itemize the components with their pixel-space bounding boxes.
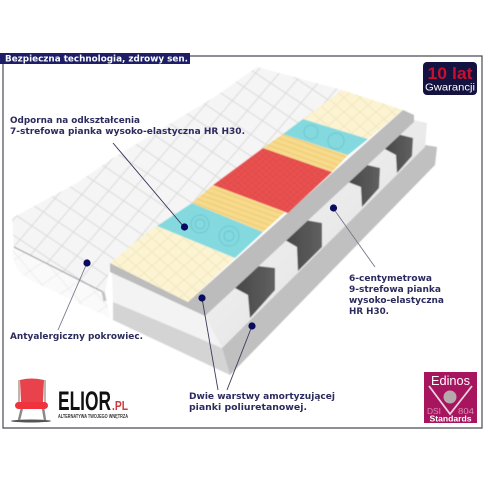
callout dots (83, 204, 337, 330)
heading banner: Bezpieczna technologia, zdrowy sen. (5, 54, 188, 64)
icon: red chair (11, 378, 51, 422)
callout text: two layers: pianki poliuretanowej. (189, 403, 307, 413)
callout text: seven-zone foam (10, 116, 245, 137)
callout text: two layers: Dwie warstwy amortyzującej (189, 392, 335, 402)
zone: front cream (110, 226, 235, 302)
callout text: nine-zone foam: wysoko-elastyczna (349, 296, 444, 306)
callout text: two layers (189, 392, 335, 413)
nine-zone foam (112, 120, 427, 348)
callout text: nine-zone foam: HR H30. (349, 307, 389, 317)
logo: Elior (11, 378, 128, 422)
zone: front cyan (157, 203, 263, 258)
callout text: seven-zone foam: Odporna na odkształcenia (10, 116, 140, 126)
badge: Edinos standards: 804 (458, 407, 475, 416)
callout lines (58, 143, 375, 390)
callout text: nine-zone foam: 6-centymetrowa (349, 274, 432, 284)
seven-zone foam (110, 90, 403, 302)
grey top foam band (110, 110, 414, 316)
badge: 10 year guarantee (423, 62, 477, 95)
callout text: nine-zone foam (349, 274, 444, 317)
callout text: cover: Antyalergiczny pokrowiec. (10, 332, 143, 342)
mattress cover (12, 67, 342, 318)
zone: back cream (303, 90, 403, 139)
badge: 10 year guarantee: Gwarancji (425, 82, 475, 94)
badge: Edinos standards: DSI (427, 407, 441, 416)
callout text: nine-zone foam: 9-strefowa pianka (349, 285, 441, 295)
badge: Edinos standards: Standards (430, 414, 472, 424)
callout text: seven-zone foam: 7-strefowa pianka wysoko-elastyczna HR H30. (10, 127, 245, 137)
frame (3, 56, 482, 428)
zone: back cyan (283, 119, 368, 155)
bottom foam layer (113, 145, 437, 375)
logo domain suffix: .PL (112, 398, 128, 413)
zone: back yellow (263, 134, 348, 172)
zone: red (213, 148, 332, 213)
logo tagline: ALTERNATYWA TWOJEGO WNĘTRZA (58, 414, 128, 420)
badge: Edinos standards (424, 372, 477, 424)
badge: Edinos standards: Edinos (431, 374, 470, 388)
badge: 10 year guarantee: 10 lat (428, 64, 473, 83)
zone: front yellow (192, 185, 285, 232)
mattress illustration (12, 67, 437, 375)
logo wordmark: ELIOR (58, 386, 111, 416)
